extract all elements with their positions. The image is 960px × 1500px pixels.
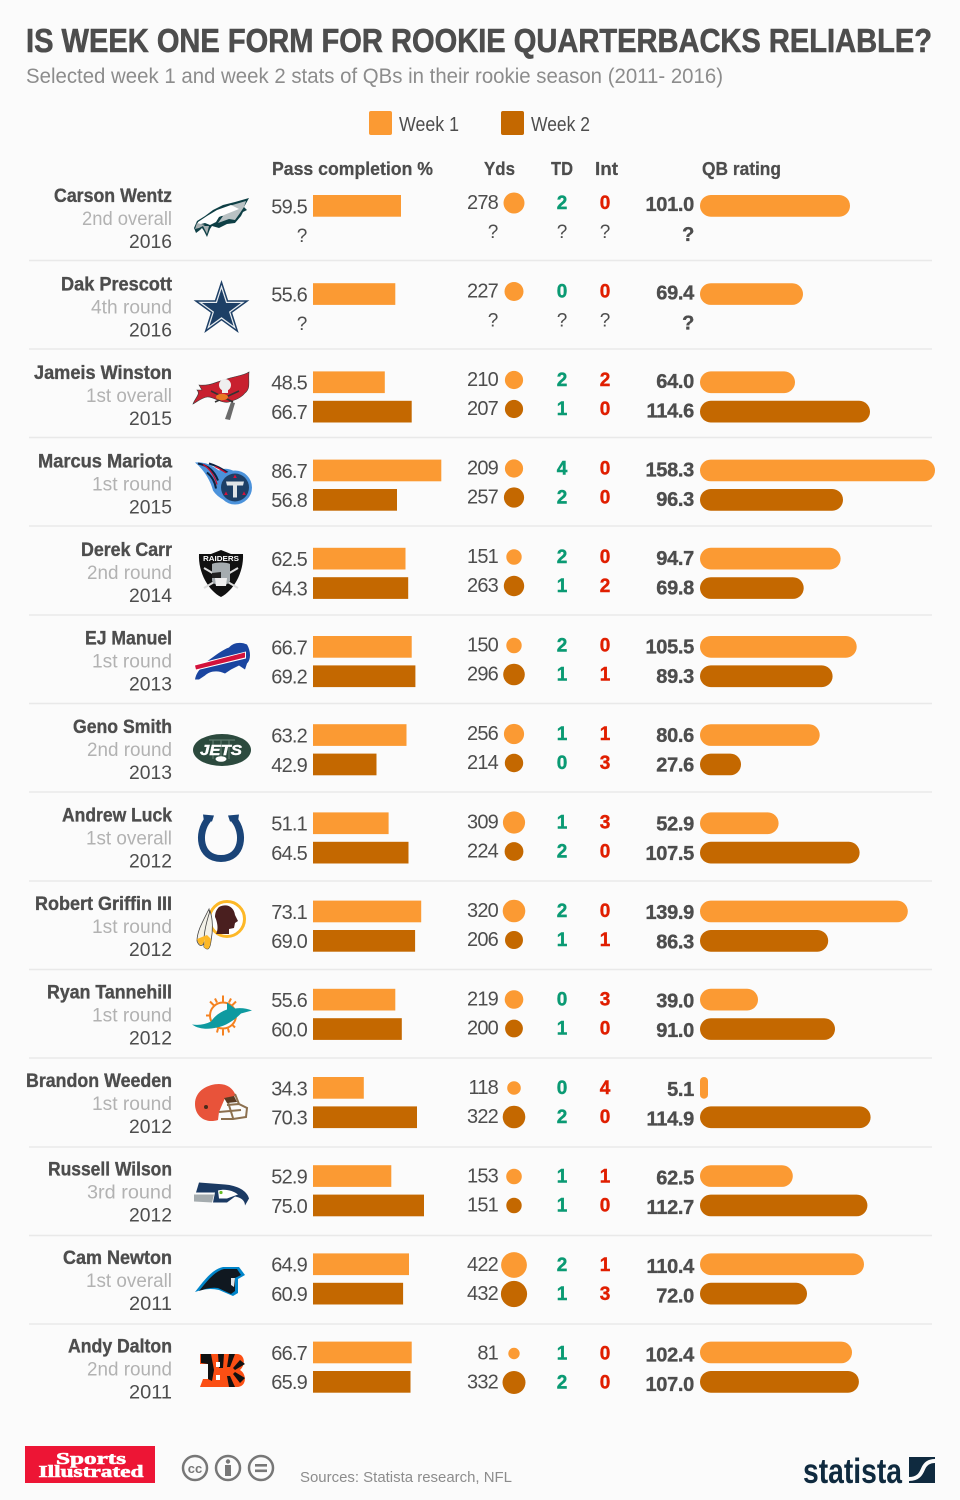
- row: Ryan Tannehill: 1: [557, 1018, 568, 1040]
- legend: Week 1: [399, 114, 459, 136]
- pass completion bars: [271, 1165, 424, 1218]
- row: Andrew Luck: 1: [557, 812, 568, 834]
- row: Derek Carr: 2nd round: [87, 563, 172, 584]
- pass completion bars: 75.0: [271, 1196, 308, 1218]
- row: Robert Griffin III: 86.3: [656, 932, 694, 954]
- row: Derek Carr: 2: [600, 576, 610, 597]
- pass completion bars: 52.9: [271, 1167, 308, 1189]
- pass completion bars: 64.9: [271, 1255, 308, 1277]
- row: Jameis Winston: 0: [600, 399, 610, 420]
- row: Geno Smith: [73, 717, 820, 784]
- icon: Jets logo: JETS: [200, 742, 242, 759]
- row: Brandon Weeden: 2: [557, 1107, 567, 1128]
- QB rating bars: [700, 1077, 871, 1128]
- pass completion bars: 62.5: [271, 549, 308, 571]
- QB rating bar: [700, 195, 850, 217]
- icon: Buccaneers logo: [193, 372, 249, 420]
- row: Russell Wilson: 2012: [129, 1206, 172, 1226]
- pass completion bars: 64.5: [271, 843, 308, 865]
- row: Dak Prescott: 4th round: [91, 298, 172, 318]
- row: EJ Manuel: [85, 628, 857, 696]
- row: Marcus Mariota: 2015: [129, 498, 172, 518]
- row: Marcus Mariota: Marcus Mariota: [38, 452, 172, 472]
- row: Dak Prescott: 2016: [129, 320, 172, 342]
- legend: [369, 111, 590, 136]
- row: Brandon Weeden: 114.9: [647, 1108, 694, 1130]
- row: Andy Dalton: 0: [600, 1344, 610, 1364]
- icon: Creative Commons licence: cc: [188, 1461, 202, 1476]
- pass completion bars: [271, 460, 441, 512]
- column headers: [272, 159, 781, 179]
- row: Carson Wentz: ?: [557, 222, 567, 243]
- row: Marcus Mariota: 1st round: [92, 474, 172, 496]
- row: Carson Wentz: [54, 186, 850, 253]
- pass completion bars: 63.2: [271, 726, 308, 748]
- pass completion bar: 55.6: [271, 285, 308, 307]
- row: Brandon Weeden: Brandon Weeden: [26, 1071, 172, 1092]
- pass completion bars: [271, 1077, 417, 1130]
- row: Andrew Luck: 224: [467, 840, 499, 862]
- row: Ryan Tannehill: 200: [467, 1018, 499, 1040]
- row: Dak Prescott: ?: [557, 310, 567, 332]
- row: Russell Wilson: 0: [600, 1196, 610, 1216]
- row: Andy Dalton: Andy Dalton: [68, 1336, 172, 1358]
- row: Andrew Luck: [62, 806, 860, 872]
- row: Dak Prescott: ?: [682, 312, 694, 334]
- row: Cam Newton: 3: [600, 1284, 610, 1305]
- row: Geno Smith: 1: [600, 724, 611, 745]
- row: Andrew Luck: 3: [600, 812, 610, 834]
- row: Russell Wilson: Russell Wilson: [48, 1160, 172, 1180]
- row: Robert Griffin III: 1: [600, 930, 611, 951]
- row: Carson Wentz: 0: [600, 193, 610, 214]
- row: Marcus Mariota: 0: [600, 488, 610, 508]
- row: Cam Newton: [63, 1248, 864, 1315]
- icon: Colts logo: [201, 814, 241, 858]
- row: Robert Griffin III: 1: [557, 930, 568, 951]
- row: Brandon Weeden: 1st round: [92, 1094, 172, 1115]
- row: Cam Newton: 1: [557, 1284, 568, 1305]
- QB rating bars: [700, 989, 835, 1040]
- icon: Titans logo: [195, 462, 252, 504]
- row: Russell Wilson: 1: [557, 1196, 568, 1216]
- QB rating bars: [700, 724, 820, 775]
- pass completion bars: 70.3: [271, 1108, 308, 1130]
- QB rating bars: [700, 636, 857, 687]
- QB rating bars: [700, 371, 870, 422]
- row: Geno Smith: 27.6: [656, 754, 694, 776]
- row: EJ Manuel: 1st round: [92, 652, 172, 672]
- pass completion bars: 69.2: [271, 667, 308, 689]
- row: Brandon Weeden: 0: [557, 1078, 567, 1099]
- row: Jameis Winston: 2: [557, 370, 567, 391]
- row: Robert Griffin III: 2012: [129, 940, 172, 961]
- row: EJ Manuel: 0: [600, 636, 610, 656]
- pass completion bars: [271, 548, 408, 600]
- row: Brandon Weeden: [26, 1071, 871, 1138]
- pass completion bars: 65.9: [271, 1372, 308, 1394]
- pass completion bar: [271, 283, 395, 335]
- pass completion bars: 34.3: [271, 1078, 308, 1100]
- row: Andy Dalton: 107.0: [645, 1374, 694, 1396]
- icon: Seahawks logo: [194, 1182, 249, 1206]
- logo: Sports Illustrated: Sports: [56, 1449, 127, 1468]
- row: Brandon Weeden: 4: [600, 1078, 611, 1099]
- row: Marcus Mariota: 2: [557, 488, 567, 508]
- row: EJ Manuel: 1: [557, 664, 568, 686]
- row: Dak Prescott: [61, 274, 803, 342]
- pass completion bars: 73.1: [271, 902, 308, 924]
- row: EJ Manuel: 2013: [129, 674, 172, 696]
- row: Derek Carr: [81, 540, 841, 607]
- row: Ryan Tannehill: 0: [600, 1018, 610, 1040]
- row: Cam Newton: Cam Newton: [63, 1248, 172, 1269]
- row: Geno Smith: 3: [600, 753, 610, 774]
- row: Andrew Luck: 107.5: [645, 843, 694, 865]
- source note: Sources: Statista research, NFL: [300, 1469, 512, 1486]
- row: Derek Carr: 151: [467, 546, 499, 568]
- row: EJ Manuel: 89.3: [656, 666, 694, 688]
- row: Derek Carr: 0: [600, 547, 610, 568]
- pass completion bars: 51.1: [271, 814, 308, 836]
- pass completion bars: 69.0: [271, 931, 308, 953]
- row: Carson Wentz: 278: [467, 192, 499, 214]
- row: EJ Manuel: 105.5: [645, 636, 694, 658]
- pass completion bars: 60.0: [271, 1019, 308, 1041]
- row: Carson Wentz: 2nd overall: [82, 209, 172, 230]
- row: EJ Manuel: EJ Manuel: [85, 628, 172, 650]
- row: Jameis Winston: 2: [600, 370, 610, 391]
- row: Derek Carr: 263: [467, 575, 499, 597]
- row: Brandon Weeden: 0: [600, 1107, 610, 1128]
- row: Robert Griffin III: Robert Griffin III: [35, 894, 172, 915]
- logo: Sports Illustrated: Illustrated: [38, 1462, 144, 1481]
- row: Jameis Winston: 210: [467, 369, 499, 391]
- row: Ryan Tannehill: 219: [467, 988, 499, 1010]
- row: Andrew Luck: 1st overall: [86, 828, 172, 850]
- pass completion bars: [271, 371, 412, 424]
- row: Carson Wentz: ?: [488, 222, 498, 243]
- pass completion bars: 56.8: [271, 490, 308, 512]
- row: Russell Wilson: 1: [600, 1166, 611, 1188]
- row: Jameis Winston: 114.6: [647, 400, 694, 422]
- row: Geno Smith: 1: [557, 724, 568, 745]
- row: Jameis Winston: 1: [557, 399, 568, 420]
- row: Derek Carr: 94.7: [656, 548, 694, 570]
- subtitle: Selected week 1 and week 2 stats of QBs in their rookie season (2011- 2016): [26, 65, 723, 88]
- row: Andy Dalton: 81: [477, 1342, 499, 1364]
- column headers: TD: [551, 159, 573, 179]
- row: Marcus Mariota: 4: [557, 458, 568, 480]
- row: Andrew Luck: 52.9: [656, 814, 694, 836]
- legend: Week 2: [531, 114, 590, 136]
- row: Derek Carr: 1: [557, 576, 568, 597]
- row: Robert Griffin III: 139.9: [645, 902, 694, 924]
- row: Geno Smith: Geno Smith: [73, 717, 172, 738]
- row: Derek Carr: Derek Carr: [81, 540, 173, 561]
- QB rating bars: [700, 1253, 864, 1304]
- row: Carson Wentz: 2016: [129, 232, 172, 253]
- row: Russell Wilson: [48, 1160, 867, 1226]
- QB rating bars: [700, 548, 841, 599]
- row: Andy Dalton: 332: [467, 1372, 499, 1394]
- row: Robert Griffin III: [35, 894, 908, 961]
- row: Andy Dalton: 0: [600, 1372, 610, 1394]
- row: Jameis Winston: Jameis Winston: [34, 363, 172, 384]
- row: Andrew Luck: 0: [600, 842, 610, 862]
- pass completion bars: 42.9: [271, 755, 308, 777]
- icon: Eagles logo: [194, 198, 249, 237]
- icon: Redskins logo: [197, 902, 244, 949]
- row: Brandon Weeden: 5.1: [667, 1079, 694, 1101]
- pass completion bars: 60.9: [271, 1284, 308, 1306]
- row: Marcus Mariota: 96.3: [656, 489, 694, 511]
- icon: Jets logo: [193, 734, 251, 766]
- icon: Bills logo: [194, 643, 250, 680]
- pass completion bars: [271, 636, 415, 689]
- row: Cam Newton: 72.0: [656, 1286, 694, 1308]
- row: Dak Prescott: 69.4: [656, 282, 695, 304]
- row: Russell Wilson: 3rd round: [87, 1182, 172, 1204]
- row: Marcus Mariota: 209: [467, 458, 499, 480]
- row: Brandon Weeden: 2012: [129, 1117, 172, 1138]
- row: Russell Wilson: 153: [467, 1166, 499, 1188]
- row: Jameis Winston: 1st overall: [86, 386, 172, 407]
- row: Robert Griffin III: 320: [467, 900, 499, 922]
- row: Carson Wentz: 2: [557, 193, 567, 214]
- row: Marcus Mariota: 0: [600, 458, 610, 480]
- row: EJ Manuel: 1: [600, 664, 611, 686]
- pass completion bars: [271, 989, 402, 1041]
- pass completion bars: [271, 901, 421, 953]
- row: Ryan Tannehill: 1st round: [92, 1006, 172, 1026]
- icon: Raiders logo: RAIDERS: [203, 556, 239, 563]
- pass completion bars: 48.5: [271, 373, 308, 395]
- row: Cam Newton: 2: [557, 1255, 567, 1276]
- row: Marcus Mariota: 257: [467, 486, 499, 508]
- row: Jameis Winston: 2015: [129, 409, 172, 430]
- row: Andy Dalton: 102.4: [645, 1344, 695, 1366]
- icon: Cowboys logo: [194, 280, 249, 333]
- row: Derek Carr: 69.8: [656, 578, 694, 600]
- row: Andy Dalton: 2011: [129, 1382, 172, 1404]
- row: Russell Wilson: 62.5: [656, 1168, 694, 1190]
- row: Cam Newton: 2011: [129, 1294, 172, 1315]
- icon: Dolphins logo: [192, 996, 252, 1036]
- row: Russell Wilson: 151: [467, 1194, 499, 1216]
- row: Carson Wentz: Carson Wentz: [54, 186, 172, 207]
- row: Andrew Luck: 2: [557, 842, 567, 862]
- icon: Bengals logo: [200, 1354, 245, 1387]
- pass completion bars: [271, 1342, 412, 1394]
- row: Andy Dalton: 1: [557, 1344, 568, 1364]
- row: Ryan Tannehill: Ryan Tannehill: [47, 982, 172, 1004]
- row: Jameis Winston: 64.0: [656, 371, 694, 393]
- row: Ryan Tannehill: 39.0: [656, 990, 694, 1012]
- QB rating bars: [700, 1165, 867, 1216]
- row: Marcus Mariota: 158.3: [645, 460, 694, 482]
- QB rating bars: [700, 812, 860, 864]
- row: Derek Carr: 2014: [129, 586, 172, 607]
- row: Robert Griffin III: 1st round: [92, 917, 172, 938]
- row: Dak Prescott: 227: [467, 280, 499, 302]
- row: EJ Manuel: 296: [467, 664, 499, 686]
- row: EJ Manuel: 2: [557, 636, 567, 656]
- row: Ryan Tannehill: 3: [600, 990, 610, 1010]
- pass completion bars: [271, 1253, 409, 1306]
- logo: Sports Illustrated: [25, 1446, 155, 1483]
- pass completion bars: 66.7: [271, 1343, 308, 1365]
- row: Andrew Luck: 309: [467, 812, 499, 834]
- row: Geno Smith: 80.6: [656, 725, 694, 747]
- row: Andy Dalton: [68, 1336, 859, 1404]
- pass completion bars: [271, 724, 406, 777]
- row: Marcus Mariota: [38, 452, 935, 518]
- pass completion bars: [271, 812, 408, 865]
- row: Dak Prescott: ?: [488, 310, 498, 332]
- pass completion bars: 64.3: [271, 578, 308, 600]
- row: Andrew Luck: 2012: [129, 852, 172, 872]
- row: Cam Newton: 422: [467, 1254, 499, 1276]
- pass completion bars: 66.7: [271, 402, 308, 424]
- row: Carson Wentz: 101.0: [645, 194, 694, 216]
- row: Andrew Luck: Andrew Luck: [62, 806, 172, 826]
- icon: Panthers logo: [195, 1267, 245, 1296]
- logo: Statista: statista: [803, 1452, 902, 1491]
- QB rating bars: [700, 460, 935, 511]
- icon: Browns logo: [195, 1084, 247, 1121]
- icon: Raiders logo: [199, 550, 243, 597]
- row: Cam Newton: 110.4: [647, 1256, 695, 1278]
- row: Ryan Tannehill: 2012: [129, 1028, 172, 1050]
- pass completion bar: [271, 195, 401, 247]
- row: Russell Wilson: 112.7: [647, 1197, 694, 1219]
- QB rating bars: [700, 901, 908, 952]
- column headers: Pass completion %: [272, 159, 433, 179]
- pass completion bar: 59.5: [271, 196, 308, 218]
- row: Robert Griffin III: 0: [600, 901, 610, 922]
- row: Carson Wentz: ?: [600, 222, 610, 243]
- row: EJ Manuel: 150: [467, 634, 499, 656]
- pass completion bar: ?: [297, 226, 307, 247]
- row: Brandon Weeden: 118: [468, 1077, 499, 1099]
- row: Cam Newton: 1st overall: [86, 1271, 172, 1292]
- pass completion bars: 66.7: [271, 637, 308, 659]
- row: Geno Smith: 0: [557, 753, 567, 774]
- column headers: QB rating: [702, 159, 781, 179]
- row: Geno Smith: 2013: [129, 763, 172, 784]
- pass completion bars: 55.6: [271, 990, 308, 1012]
- row: Geno Smith: 214: [467, 752, 499, 774]
- row: Ryan Tannehill: [47, 982, 835, 1050]
- row: Ryan Tannehill: 91.0: [656, 1020, 694, 1042]
- row: Andy Dalton: 2: [557, 1372, 567, 1394]
- row: Dak Prescott: 0: [557, 282, 567, 302]
- row: Dak Prescott: Dak Prescott: [61, 274, 173, 296]
- row: Robert Griffin III: 206: [467, 929, 499, 951]
- row: Derek Carr: 2: [557, 547, 567, 568]
- row: Geno Smith: 2nd round: [87, 740, 172, 761]
- QB rating bar: [700, 283, 803, 305]
- row: Cam Newton: 432: [467, 1283, 499, 1305]
- pass completion bars: 86.7: [271, 461, 308, 483]
- row: Russell Wilson: 1: [557, 1166, 568, 1188]
- row: Brandon Weeden: 322: [467, 1106, 499, 1128]
- pass completion bar: ?: [297, 314, 307, 335]
- row: Dak Prescott: 0: [600, 282, 610, 302]
- row: Jameis Winston: [34, 363, 870, 430]
- icon: Creative Commons licence: [183, 1456, 273, 1480]
- QB rating bars: [700, 1342, 859, 1393]
- row: Geno Smith: 256: [467, 723, 499, 745]
- row: Cam Newton: 1: [600, 1255, 611, 1276]
- row: Andy Dalton: 2nd round: [87, 1360, 172, 1380]
- column headers: Int: [595, 159, 618, 179]
- column headers: Yds: [484, 159, 515, 179]
- row: Robert Griffin III: 2: [557, 901, 567, 922]
- row: Carson Wentz: ?: [682, 224, 694, 246]
- row: Jameis Winston: 207: [467, 398, 499, 420]
- row: Ryan Tannehill: 0: [557, 990, 567, 1010]
- row: Dak Prescott: ?: [600, 310, 610, 332]
